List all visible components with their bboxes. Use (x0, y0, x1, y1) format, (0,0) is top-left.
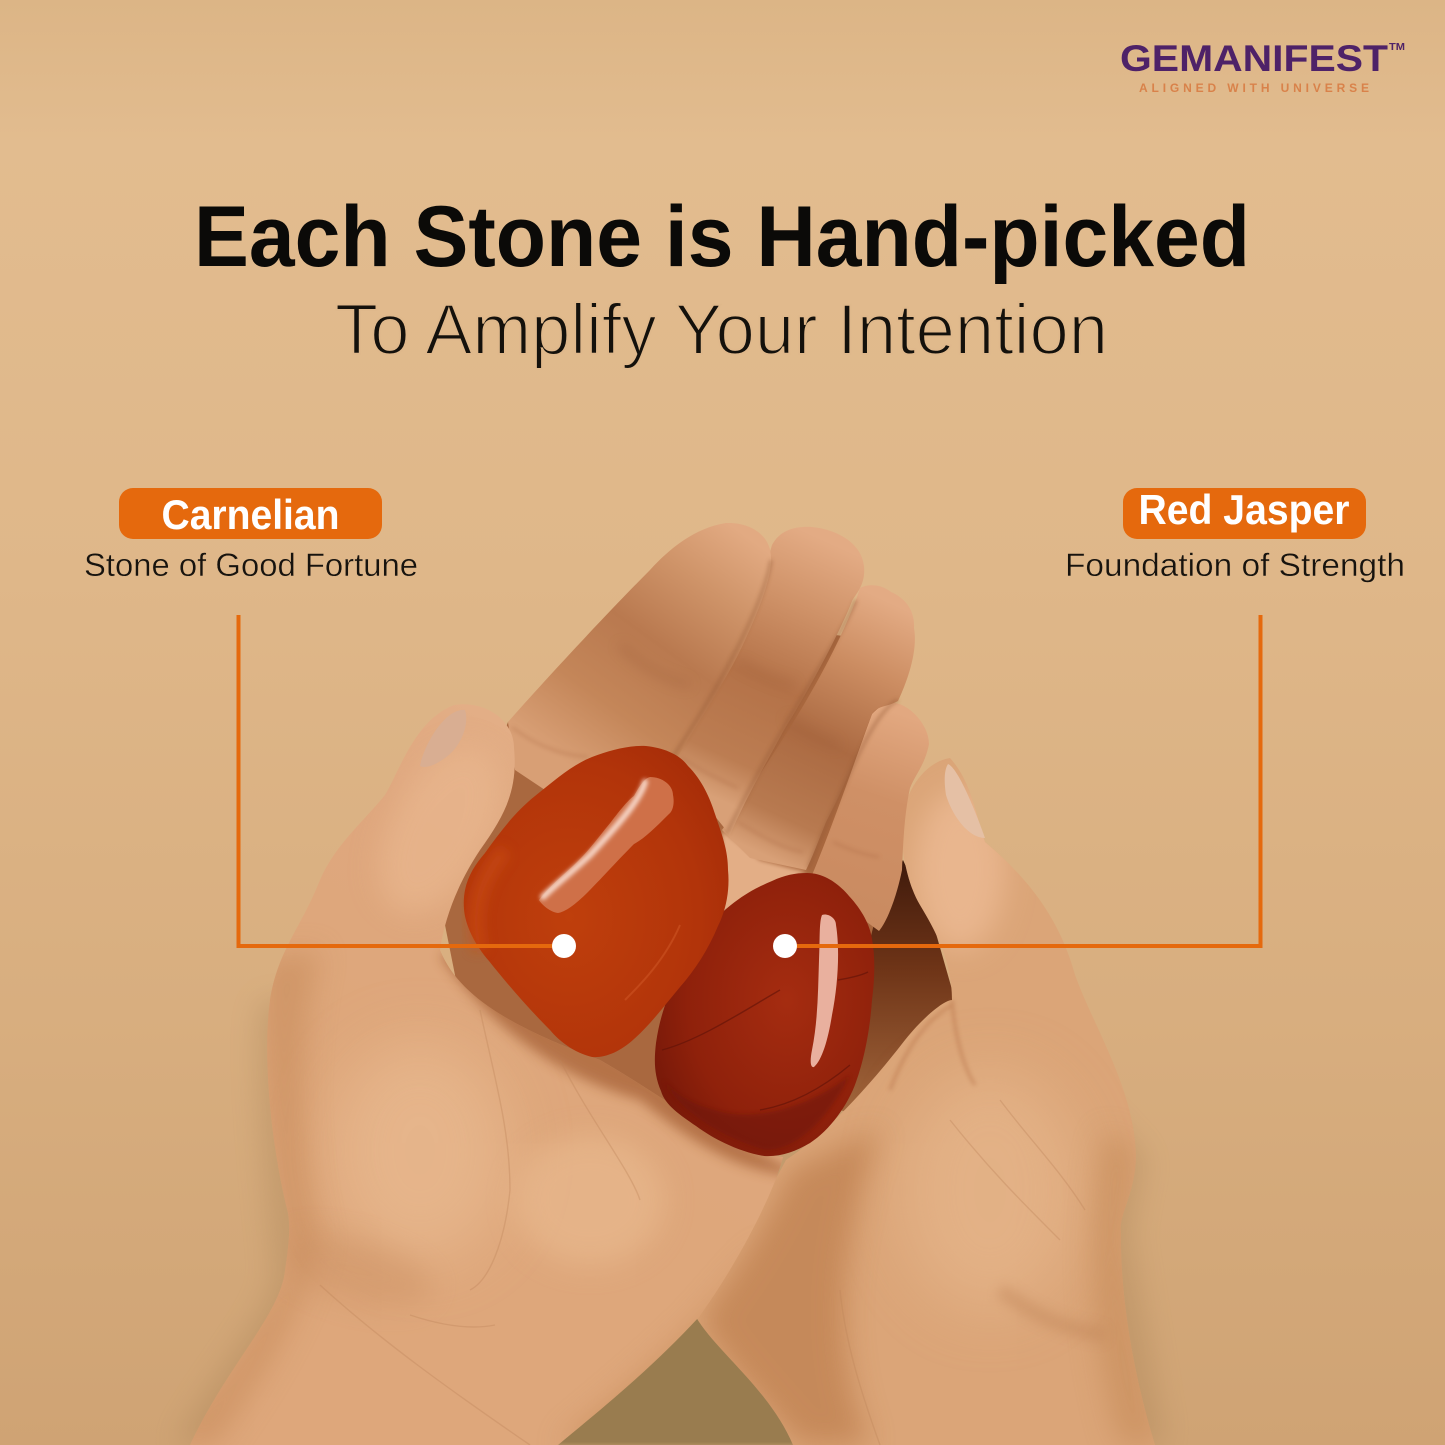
right hand tonal shading (700, 790, 1160, 1445)
right hand palm and thumb (696, 758, 1155, 1445)
dark gap between wrists (540, 1300, 810, 1445)
stone: red jasper (655, 873, 874, 1156)
jasper lower edge tone (664, 1075, 850, 1150)
carnelian glaze (539, 777, 674, 913)
Carnelian badge (119, 488, 382, 539)
pale patch below fingers (722, 830, 806, 925)
shadow below stones (440, 950, 800, 1175)
logo: Gemanifest: GEMANIFEST (1120, 38, 1388, 79)
finger creases (620, 645, 838, 745)
Red Jasper name: Red Jasper (1138, 486, 1350, 533)
middle finger (670, 527, 864, 835)
right thumb fold (890, 1000, 975, 1090)
Carnelian name: Carnelian (162, 491, 340, 538)
logo: Gemanifest: ALIGNED WITH UNIVERSE (1139, 81, 1369, 95)
carnelian edge glow (476, 850, 505, 950)
hollow of left palm (440, 620, 905, 1130)
left thumbnail (420, 710, 466, 767)
logo: Gemanifest: TM (1389, 42, 1405, 53)
logo: Gemanifest (1120, 38, 1405, 95)
soft hand shadow (175, 1000, 1165, 1445)
label: Carnelian (84, 488, 418, 583)
carnelian inner facet line (625, 925, 680, 1000)
index finger (508, 523, 771, 800)
right hand (696, 758, 1160, 1445)
carnelian highlight (543, 782, 645, 897)
Red Jasper badge (1123, 488, 1366, 539)
label: Red Jasper (1065, 486, 1405, 583)
left hand tonal shading (190, 766, 782, 1445)
title: Each Stone is Hand-picked (194, 189, 1250, 285)
right thumbnail (945, 764, 985, 838)
connector: Red Jasper (773, 615, 1260, 958)
right palm lines (840, 1100, 1085, 1445)
jasper veins (662, 972, 868, 1110)
jasper highlight (811, 915, 838, 1067)
left hand (160, 523, 929, 1445)
pinky finger (810, 703, 929, 931)
finger separation shadows (668, 560, 898, 868)
stone: carnelian (464, 746, 729, 1057)
Carnelian description: Stone of Good Fortune (84, 547, 418, 583)
connector: Carnelian (238, 615, 576, 958)
right inner dark cavity (840, 860, 965, 1130)
ring finger (722, 585, 915, 870)
subtitle: To Amplify Your Intention (335, 291, 1108, 370)
left hand palm and thumb (190, 704, 783, 1445)
Red Jasper description: Foundation of Strength (1065, 547, 1405, 583)
left palm lines (320, 1010, 640, 1445)
